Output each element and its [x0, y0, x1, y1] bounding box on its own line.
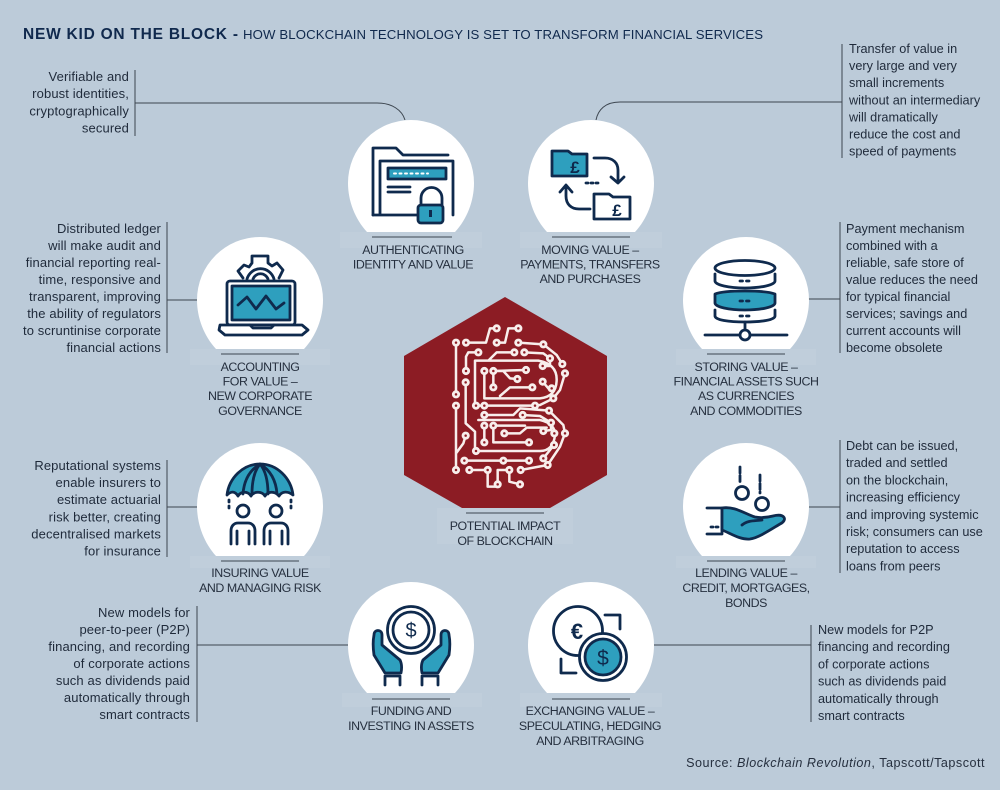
panel: insuring: [31, 443, 330, 595]
central label: POTENTIAL IMPACT: [450, 519, 561, 533]
text: storing: become obsolete: [846, 341, 943, 355]
text: accounting: time, responsive and: [39, 272, 161, 287]
text: insuring: risk better, creating: [49, 509, 161, 524]
text: accounting: to scruntinise corporate: [23, 323, 161, 338]
label: AND ARBITRAGING: [536, 734, 644, 748]
text: moving: without an intermediary: [848, 93, 981, 107]
text: funding: such as dividends paid: [56, 673, 190, 688]
panel: storing: [673, 222, 978, 418]
label: INVESTING IN ASSETS: [348, 719, 474, 733]
text: identity: secured: [82, 121, 129, 136]
text: storing: for typical financial: [846, 290, 950, 304]
text: funding: of corporate actions: [73, 656, 190, 671]
text: exchanging: smart contracts: [818, 709, 905, 723]
text: storing: current accounts will: [846, 324, 961, 338]
icon: hand with falling coins: [707, 467, 784, 539]
text: identity: cryptographically: [29, 103, 129, 118]
label: AS CURRENCIES: [698, 389, 794, 403]
label: SPECULATING, HEDGING: [519, 719, 661, 733]
label: INSURING VALUE: [211, 566, 309, 580]
icon: laptop with gear: [219, 256, 308, 335]
icon: umbrella with two people: [227, 464, 293, 544]
text: lending: Debt can be issued,: [846, 439, 958, 453]
text: moving: will dramatically: [848, 110, 938, 124]
text: funding: peer-to-peer (P2P): [79, 622, 190, 637]
icon: folders with pound signs and arrows: £: [570, 158, 580, 177]
label: LENDING VALUE –: [695, 566, 797, 580]
label: BONDS: [725, 596, 767, 610]
text: insuring: Reputational systems: [34, 458, 161, 473]
text: accounting: Distributed ledger: [57, 221, 162, 236]
text: lending: reputation to access: [846, 542, 960, 556]
text: lending: traded and settled: [846, 456, 948, 470]
text: moving: very large and very: [849, 59, 958, 73]
panel: moving value: [520, 42, 981, 286]
label: FOR VALUE –: [223, 375, 298, 389]
text: funding: automatically through: [64, 690, 190, 705]
central hexagon with blockchain B: [404, 297, 607, 544]
text: accounting: financial actions: [66, 340, 161, 355]
central label: OF BLOCKCHAIN: [457, 534, 553, 548]
text: lending: loans from peers: [846, 559, 940, 573]
label: AUTHENTICATING: [362, 243, 464, 257]
label: MOVING VALUE –: [541, 243, 639, 257]
text: insuring: decentralised markets: [31, 526, 161, 541]
icon: hands holding dollar coin: $: [405, 620, 417, 642]
text: exchanging: automatically through: [818, 692, 939, 706]
text: insuring: enable insurers to: [56, 475, 161, 490]
title: NEW KID ON THE BLOCK -: [23, 26, 238, 43]
icon: hands holding dollar coin: [373, 606, 450, 685]
text: accounting: financial reporting real-: [26, 255, 161, 270]
label: AND MANAGING RISK: [199, 581, 322, 595]
text: exchanging: of corporate actions: [818, 657, 929, 671]
label: AND COMMODITIES: [690, 404, 802, 418]
text: moving: reduce the cost and: [849, 128, 960, 142]
panel: funding: [48, 582, 482, 733]
text: funding: financing, and recording: [48, 639, 190, 654]
label: IDENTITY AND VALUE: [353, 258, 473, 272]
text: accounting: will make audit and: [47, 238, 161, 253]
text: accounting: transparent, improving: [29, 289, 161, 304]
icon: currency exchange coins: €: [571, 619, 583, 644]
text: exchanging: financing and recording: [818, 640, 950, 654]
icon: folders with pound signs and arrows: £: [612, 201, 622, 220]
text: exchanging: such as dividends paid: [818, 675, 946, 689]
text: storing: reliable, safe store of: [846, 256, 964, 270]
text: moving: Transfer of value in: [849, 42, 957, 56]
icon: folder and padlock: [373, 148, 453, 223]
icon: currency exchange coins: $: [597, 647, 609, 670]
label: CREDIT, MORTGAGES,: [682, 581, 810, 595]
text: lending: increasing efficiency: [846, 491, 961, 505]
text: insuring: for insurance: [84, 544, 161, 558]
title: [23, 26, 763, 43]
label: GOVERNANCE: [218, 404, 302, 418]
icon: currency exchange coins: [554, 606, 626, 680]
text: lending: on the blockchain,: [846, 473, 948, 487]
text: moving: small increments: [849, 76, 944, 90]
text: identity: robust identities,: [32, 86, 129, 101]
label: ACCOUNTING: [221, 360, 299, 374]
label: FINANCIAL ASSETS SUCH: [673, 375, 819, 389]
text: storing: Payment mechanism: [846, 222, 964, 236]
text: storing: combined with a: [846, 239, 939, 253]
panel: lending: [676, 439, 983, 610]
label: AND PURCHASES: [540, 272, 641, 286]
label: EXCHANGING VALUE –: [526, 704, 655, 718]
title: HOW BLOCKCHAIN TECHNOLOGY IS SET TO TRANSFORM FINANCIAL SERVICES: [243, 27, 763, 42]
text: insuring: estimate actuarial: [57, 492, 161, 507]
text: storing: services; savings and: [846, 307, 967, 321]
label: NEW CORPORATE: [208, 389, 312, 403]
text: funding: New models for: [98, 605, 191, 620]
source note: Source: Blockchain Revolution, Tapscott/Tapscott: [686, 756, 985, 770]
text: accounting: the ability of regulators: [27, 306, 161, 321]
panel: authenticating identity: [29, 69, 482, 272]
panel: accounting: [23, 221, 330, 418]
text: exchanging: New models for P2P: [818, 623, 934, 637]
panel: exchanging: [519, 582, 950, 748]
text: identity: Verifiable and: [49, 69, 129, 84]
icon: database stack: [705, 260, 787, 340]
text: moving: speed of payments: [849, 145, 956, 159]
label: STORING VALUE –: [695, 360, 798, 374]
icon: folders with pound signs and arrows: [552, 151, 630, 220]
text: lending: and improving systemic: [846, 508, 979, 522]
text: funding: smart contracts: [99, 707, 190, 722]
label: FUNDING AND: [371, 704, 452, 718]
text: storing: value reduces the need: [846, 273, 978, 287]
text: lending: risk; consumers can use: [846, 525, 983, 539]
label: PAYMENTS, TRANSFERS: [520, 258, 660, 272]
